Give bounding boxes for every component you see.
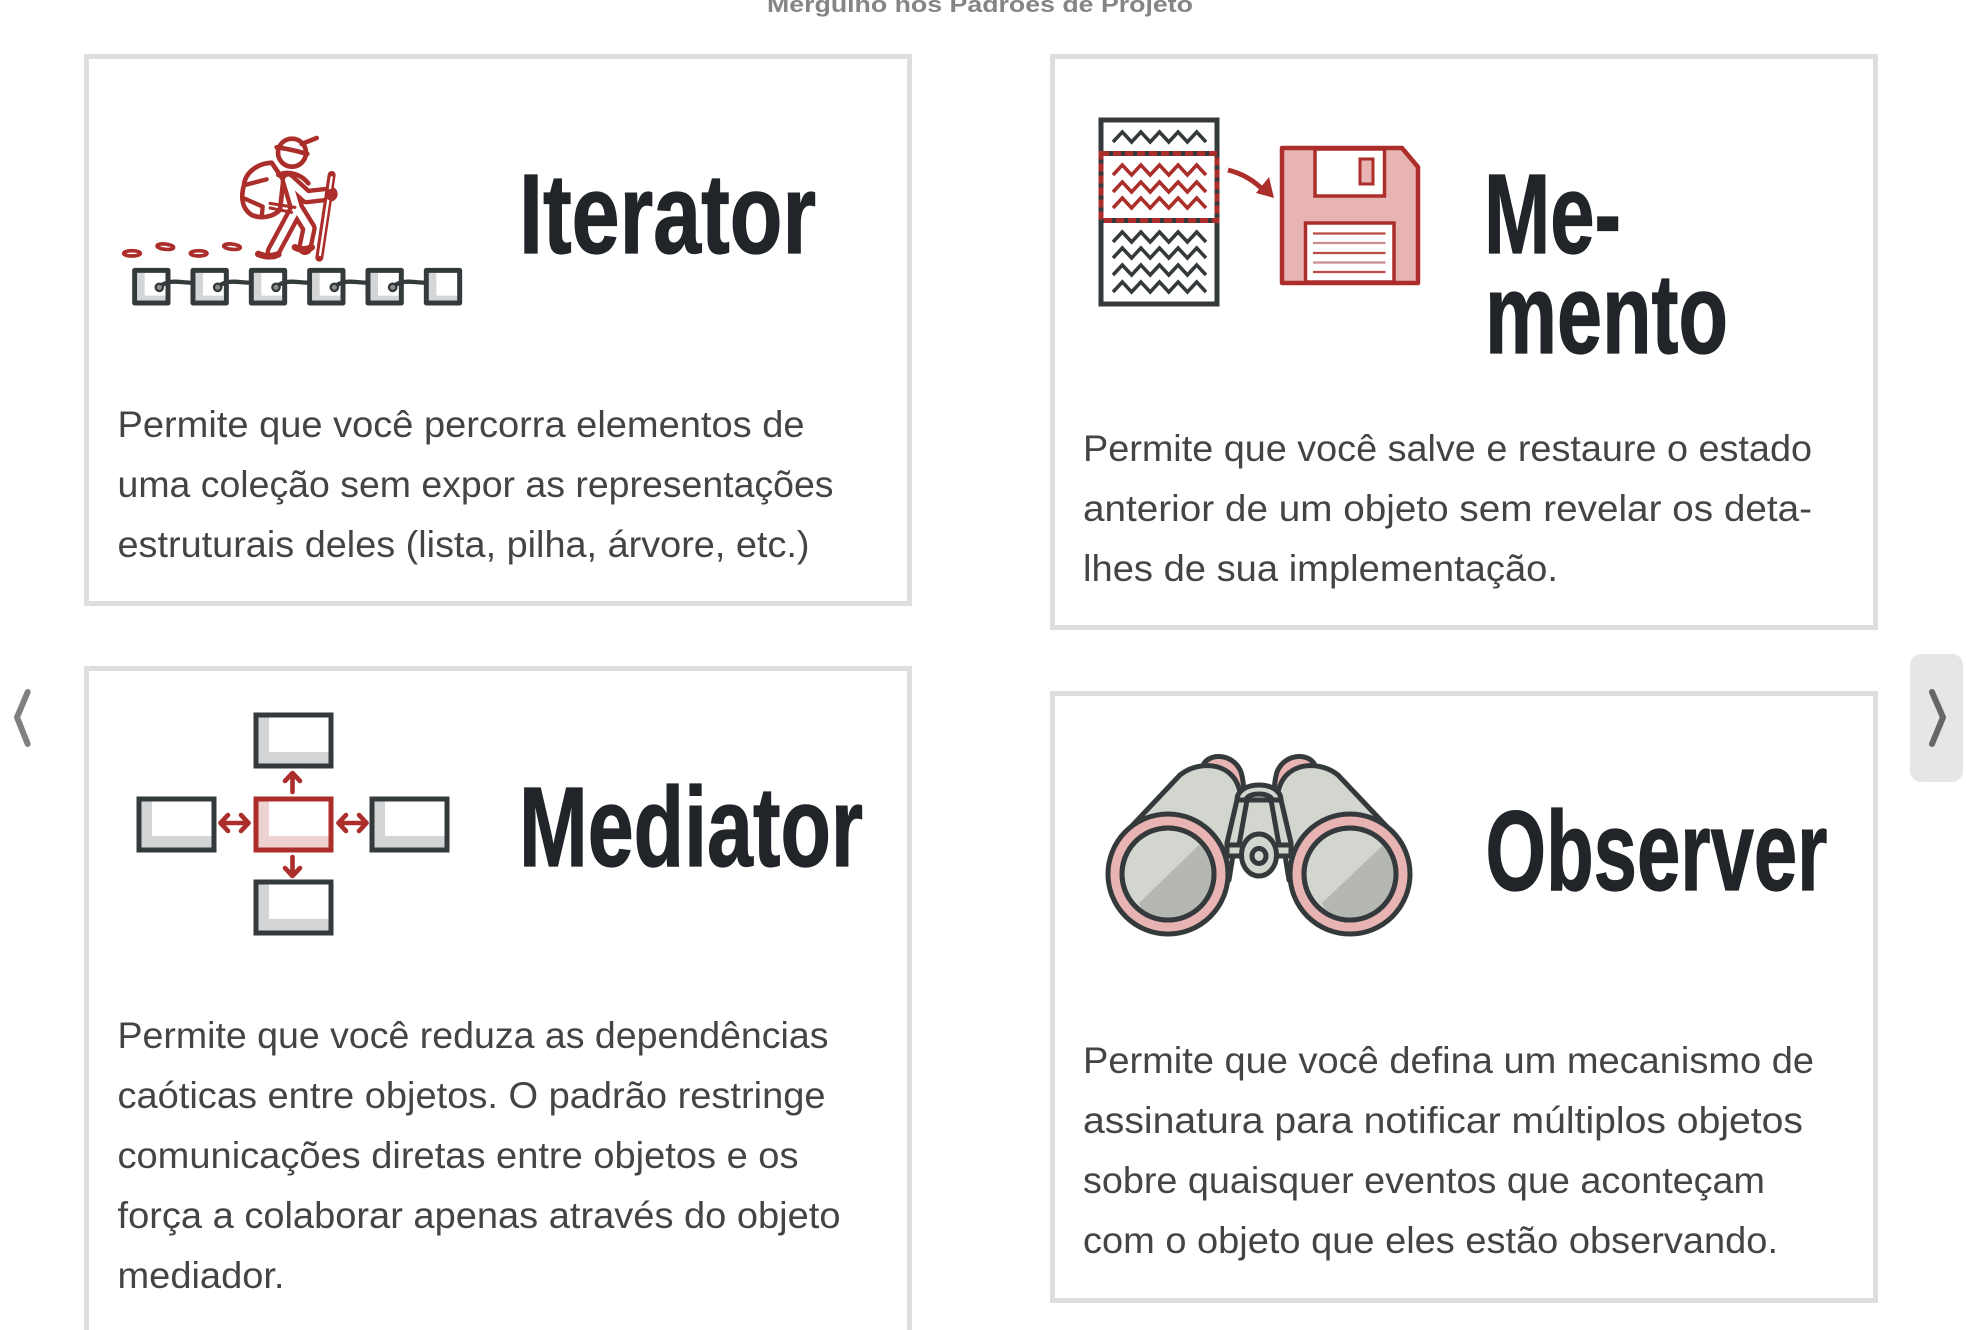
text: Memento description: anterior de um objeto sem revelar os deta- [1083, 488, 1812, 529]
button: next [1910, 654, 1963, 782]
text: Mediator description: comunicações diretas entre objetos e os [118, 1135, 799, 1176]
heading: Memento: mento [1485, 251, 1728, 377]
text: Iterator description [118, 404, 834, 565]
panel: Iterator [86, 56, 910, 604]
text: Observer description: Permite que você defina um mecanismo de [1083, 1040, 1814, 1081]
icon: binoculars [1108, 756, 1410, 934]
text: Observer description: assinatura para notificar múltiplos objetos [1083, 1100, 1803, 1141]
icon: mediator connecting four boxes [139, 715, 447, 933]
text: Memento description: Permite que você salve e restaure o estado [1083, 428, 1812, 469]
arrow: save [1228, 170, 1274, 198]
icon: previous chevron [17, 692, 28, 744]
icon: document snapshot saved to floppy disk [1101, 120, 1418, 304]
text: Observer description: sobre quaisquer eventos que aconteçam [1083, 1160, 1765, 1201]
text: Mediator description: mediador. [118, 1255, 284, 1296]
heading: Memento: Me- [1484, 151, 1621, 277]
text: Observer description [1083, 1040, 1814, 1261]
panel: Mediator [86, 668, 910, 1330]
heading: Iterator: Iterator [519, 151, 816, 277]
panel: Observer [1052, 694, 1876, 1300]
text: Iterator description: estruturais deles (lista, pilha, árvore, etc.) [118, 524, 809, 565]
text: Mediator description: caóticas entre objetos. O padrão restringe [118, 1075, 826, 1116]
text: Memento description: lhes de sua implementação. [1083, 548, 1558, 589]
icon: hiker walking on a linked chain [124, 138, 460, 303]
panel: Memento [1052, 56, 1876, 628]
text: Mediator description: Permite que você reduza as dependências [118, 1015, 828, 1056]
heading: Mediator: Mediator [519, 764, 863, 890]
text: Mediator description: força a colaborar apenas através do objeto [118, 1195, 841, 1236]
text: Iterator description: Permite que você percorra elementos de [118, 404, 805, 445]
text: Iterator description: uma coleção sem expor as representações [118, 464, 834, 505]
text: Mediator description [118, 1015, 841, 1296]
floppy disk [1282, 148, 1418, 283]
heading: Memento [1484, 151, 1728, 377]
text: Memento description [1083, 428, 1812, 589]
text: Observer description: com o objeto que eles estão observando. [1083, 1220, 1778, 1261]
